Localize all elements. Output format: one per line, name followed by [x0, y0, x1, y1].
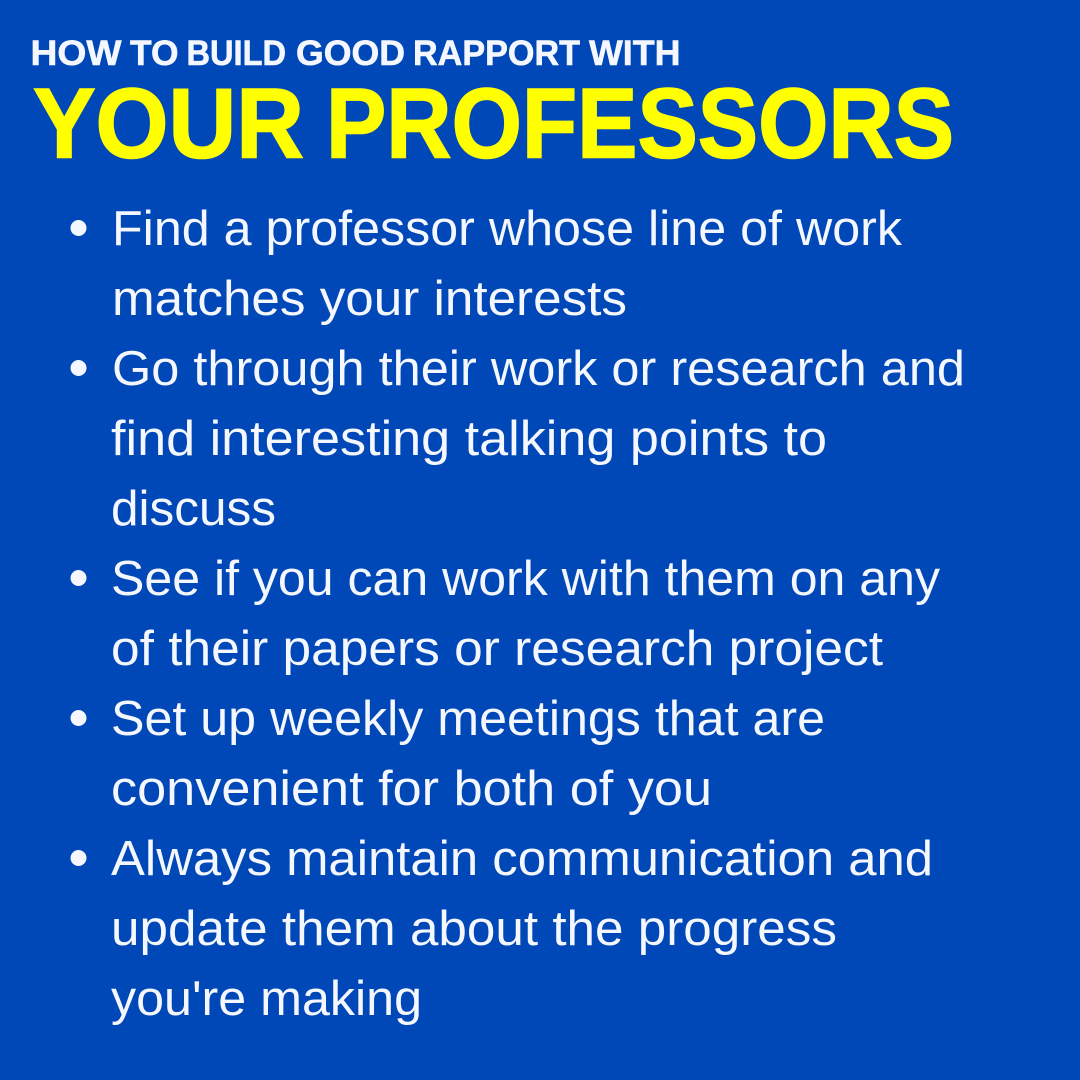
heading: how to build good rapport with: BUILD — [186, 34, 286, 73]
bullet 2: go through their work — [70, 342, 965, 536]
heading: how to build good rapport with: TO — [130, 34, 178, 73]
bullet 5: maintain communication: update them about the progress — [111, 902, 837, 956]
title: your professors: YOUR — [33, 68, 304, 178]
heading: how to build good rapport with: RAPPORT — [413, 34, 580, 73]
heading: how to build good rapport with — [30, 34, 680, 73]
bullet 1: find a professor: matches your interests — [112, 272, 627, 326]
bullet 5: maintain communication: Always maintain communication and — [111, 832, 933, 886]
bullet 2: go through their work: discuss — [111, 482, 276, 536]
bullet 3: work with them — [70, 552, 941, 676]
bullet 2: go through their work: Go through their work or research and — [112, 342, 965, 396]
heading: how to build good rapport with: HOW — [30, 34, 122, 73]
bullet list — [70, 202, 965, 1026]
bullet 4: weekly meetings — [70, 692, 825, 816]
bullet 4: weekly meetings: Set up weekly meetings that are — [111, 692, 825, 746]
bullet 1: find a professor: Find a professor whose line of work — [112, 202, 903, 256]
heading: how to build good rapport with: WITH — [589, 34, 680, 73]
title: your professors — [33, 68, 954, 178]
bullet 5: maintain communication — [70, 832, 933, 1026]
bullet 2: go through their work: find interesting talking points to — [111, 412, 827, 466]
bullet 3: work with them: See if you can work with them on any — [111, 552, 941, 606]
bullet 4: weekly meetings: convenient for both of you — [111, 762, 712, 816]
title: your professors: PROFESSORS — [326, 68, 954, 178]
bullet 5: maintain communication: you're making — [111, 972, 422, 1026]
bullet 1: find a professor — [70, 202, 903, 326]
bullet 3: work with them: of their papers or research project — [111, 622, 883, 676]
heading: how to build good rapport with: GOOD — [296, 34, 405, 73]
